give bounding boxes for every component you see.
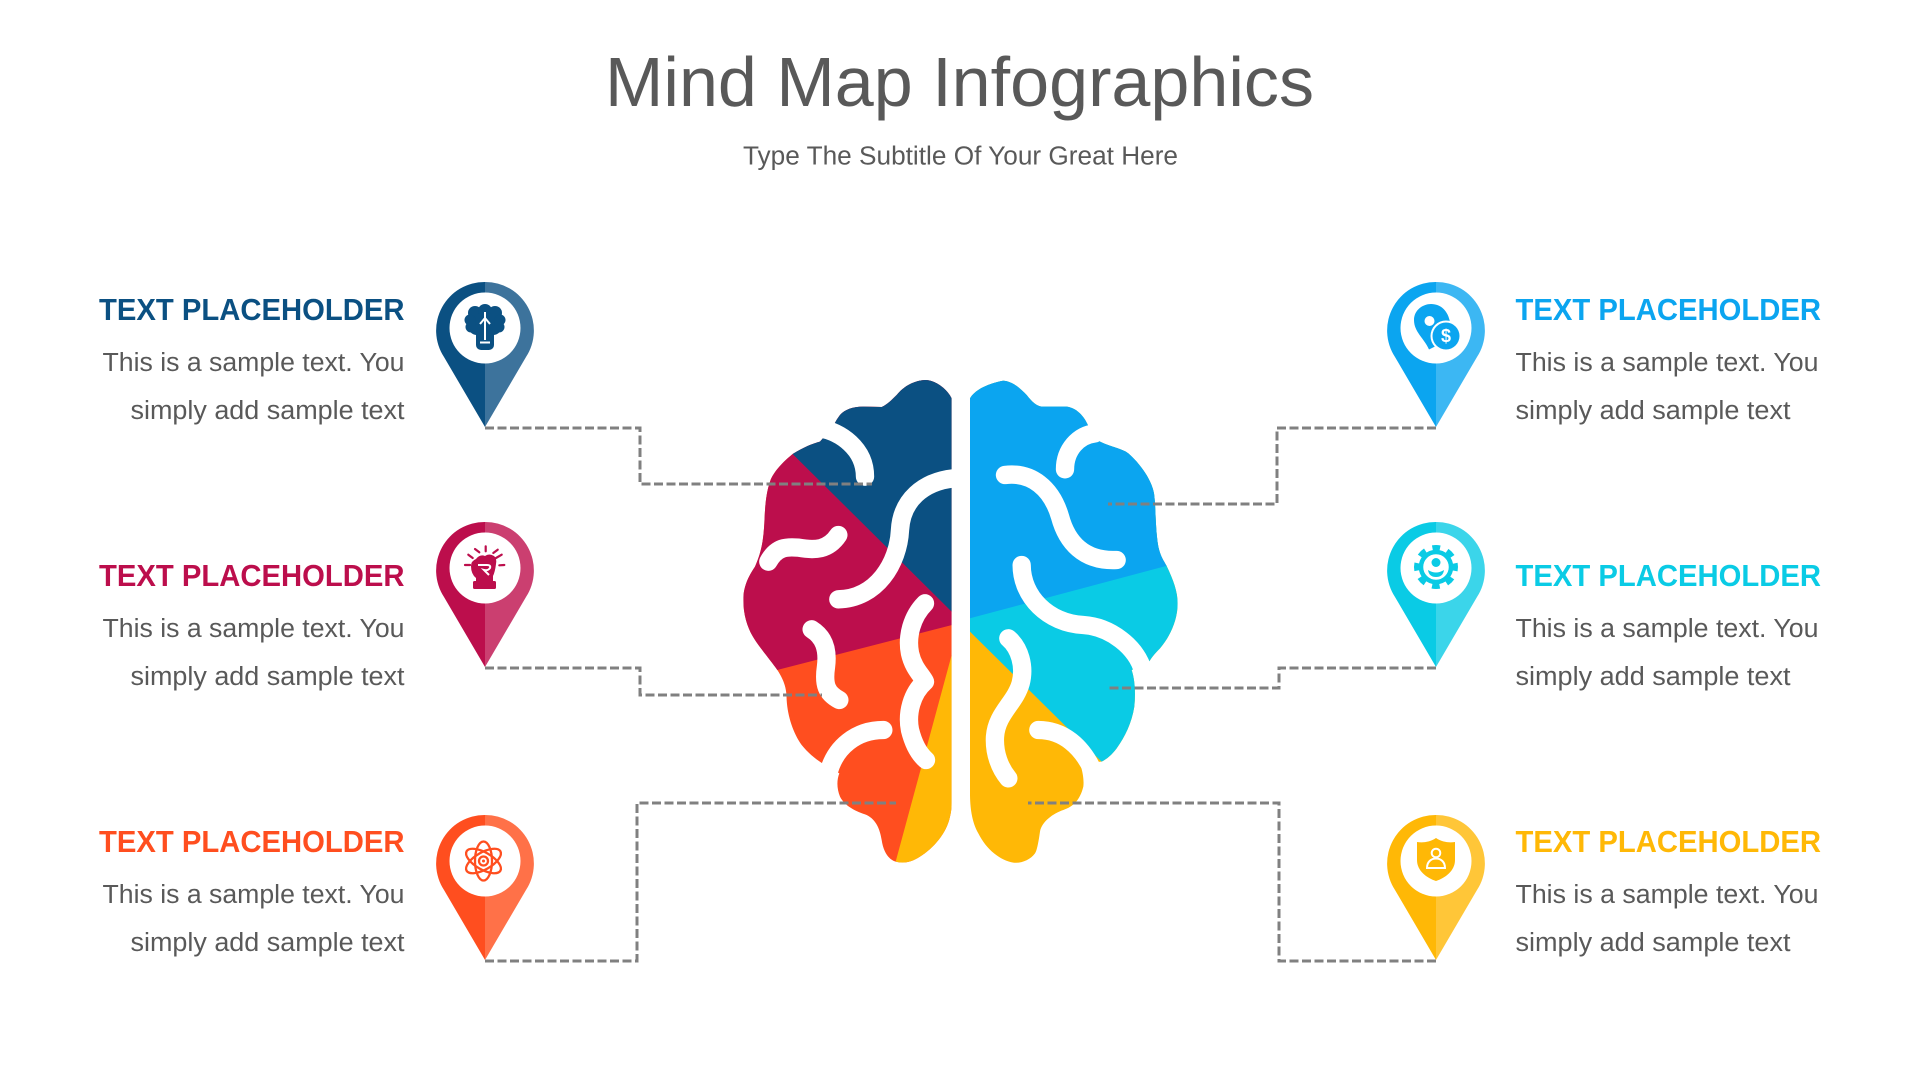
heading: TEXT PLACEHOLDER [99, 558, 404, 593]
pin: gear person icon [1387, 522, 1485, 667]
body text [1516, 349, 1818, 425]
pin: location coin icon: $ [1441, 326, 1451, 346]
heading: TEXT PLACEHOLDER [1516, 558, 1821, 593]
item: bottom right [1387, 815, 1821, 960]
body text: This is a sample text. You [1516, 881, 1818, 909]
pin: location coin icon [1387, 282, 1485, 427]
body text: This is a sample text. You [102, 615, 404, 643]
body text: simply add sample text [1516, 397, 1790, 425]
heading: TEXT PLACEHOLDER [1516, 824, 1821, 859]
body text [102, 615, 404, 691]
brain folds [768, 428, 1143, 778]
body text: This is a sample text. You [1516, 349, 1818, 377]
heading: TEXT PLACEHOLDER [99, 292, 404, 327]
pin: brain idea icon [436, 282, 534, 427]
body text: This is a sample text. You [102, 881, 404, 909]
body text: simply add sample text [1516, 663, 1790, 691]
body text [1516, 615, 1818, 691]
brain illustration [720, 360, 1220, 893]
subtitle: Type The Subtitle Of Your Great Here [743, 142, 1178, 170]
body text: simply add sample text [130, 929, 404, 957]
body text [102, 349, 404, 425]
left hemisphere [743, 380, 952, 863]
body text [102, 881, 404, 957]
heading: TEXT PLACEHOLDER [99, 824, 404, 859]
item: middle right [1387, 522, 1821, 691]
right hemisphere [970, 380, 1178, 863]
body text: simply add sample text [130, 663, 404, 691]
heading: TEXT PLACEHOLDER [1516, 292, 1821, 327]
item: middle left [99, 522, 534, 691]
pin: fist icon [436, 522, 534, 667]
item: top right [1387, 282, 1821, 427]
pin: shield person icon [1387, 815, 1485, 960]
body text: This is a sample text. You [1516, 615, 1818, 643]
body text [1516, 881, 1818, 957]
pin: atom icon [436, 815, 534, 960]
item: top left [99, 282, 534, 427]
title: Mind Map Infographics [605, 43, 1314, 121]
item: bottom left [99, 815, 534, 960]
body text: This is a sample text. You [102, 349, 404, 377]
body text: simply add sample text [1516, 929, 1790, 957]
body text: simply add sample text [130, 397, 404, 425]
connectors [485, 428, 1436, 961]
